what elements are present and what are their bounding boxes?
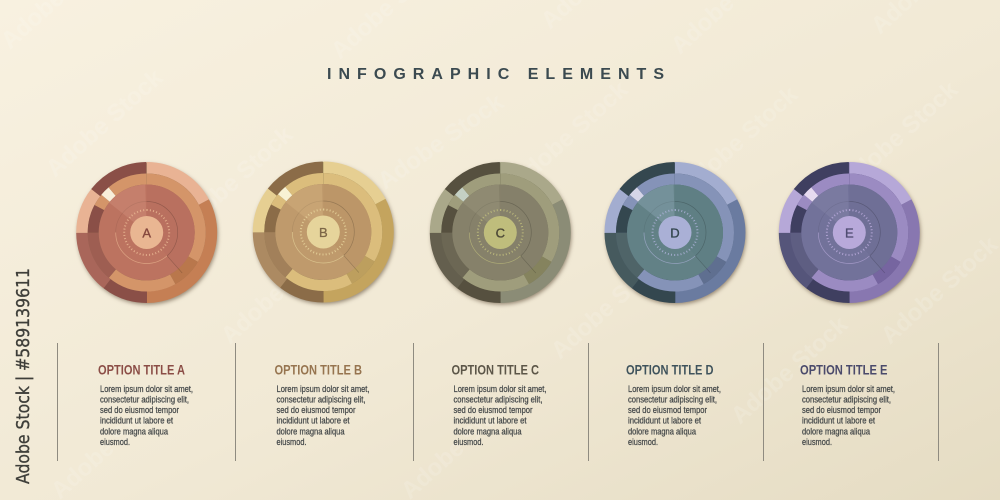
text block D — [626, 362, 721, 447]
stock watermark pattern: Adobe Stock — [726, 311, 854, 429]
text block E: OPTION TITLE E — [800, 362, 888, 378]
stock watermark pattern: Adobe Stock — [676, 81, 804, 199]
text block C: incididunt ut labore et — [454, 416, 527, 426]
text block B: eiusmod. — [276, 437, 306, 447]
text block B: Lorem ipsum dolor sit amet, — [276, 384, 370, 394]
text block E: Lorem ipsum dolor sit amet, — [802, 384, 895, 394]
text block C: dolore magna aliqua — [454, 426, 522, 436]
badge A: A — [142, 225, 151, 240]
title: INFOGRAPHIC ELEMENTS — [327, 66, 664, 83]
text block B — [274, 362, 370, 447]
text block A: sed do eiusmod tempor — [100, 405, 179, 415]
text block D: dolore magna aliqua — [628, 426, 697, 436]
text block C: Lorem ipsum dolor sit amet, — [454, 384, 546, 394]
wheel A — [77, 162, 217, 302]
text block B: OPTION TITLE B — [274, 362, 362, 378]
wheel E — [779, 162, 919, 302]
text block A: Lorem ipsum dolor sit amet, — [100, 384, 193, 394]
badge C: C — [496, 225, 505, 240]
stock watermark pattern: Adobe Stock — [41, 64, 169, 182]
text block C: OPTION TITLE C — [452, 362, 539, 378]
text block C: sed do eiusmod tempor — [454, 405, 532, 415]
text block D: consectetur adipiscing elit, — [628, 394, 717, 404]
stock watermark pattern: Adobe Stock — [546, 246, 674, 364]
text block E: dolore magna aliqua — [802, 426, 871, 436]
stock watermark pattern: Adobe Stock — [216, 231, 344, 349]
text block B: dolore magna aliqua — [276, 426, 345, 436]
stock watermark pattern: Adobe Stock — [506, 76, 634, 194]
text block B: sed do eiusmod tempor — [276, 405, 356, 415]
text block D: OPTION TITLE D — [626, 362, 714, 378]
text block C: eiusmod. — [454, 437, 484, 447]
wheel B — [253, 162, 393, 302]
text block A: incididunt ut labore et — [100, 416, 173, 426]
text block C — [452, 362, 546, 447]
badge B: B — [319, 225, 328, 240]
stock watermark pattern: Adobe Stock — [876, 231, 1000, 349]
wheel C — [430, 162, 570, 302]
stock id label: Adobe Stock | #589139611 — [13, 268, 34, 484]
text block C: consectetur adipiscing elit, — [454, 394, 542, 404]
text block A: OPTION TITLE A — [98, 362, 185, 378]
text block B: incididunt ut labore et — [276, 416, 350, 426]
text block A: consectetur adipiscing elit, — [100, 394, 189, 404]
text block D: incididunt ut labore et — [628, 416, 701, 426]
text block E — [800, 362, 895, 447]
text block E: eiusmod. — [802, 437, 832, 447]
text block D: sed do eiusmod tempor — [628, 405, 707, 415]
text block A: eiusmod. — [100, 437, 130, 447]
text block D: Lorem ipsum dolor sit amet, — [628, 384, 721, 394]
wheel D — [605, 162, 745, 302]
text block E: consectetur adipiscing elit, — [802, 394, 891, 404]
stock watermark pattern: Adobe Stock — [171, 121, 299, 239]
text block E: sed do eiusmod tempor — [802, 405, 881, 415]
text block B: consectetur adipiscing elit, — [276, 394, 366, 404]
stock watermark pattern: Adobe Stock — [373, 88, 509, 195]
text block A: dolore magna aliqua — [100, 426, 169, 436]
badge E: E — [845, 225, 854, 240]
text block A — [98, 362, 193, 447]
text block D: eiusmod. — [628, 437, 658, 447]
badge D: D — [670, 225, 680, 240]
text block E: incididunt ut labore et — [802, 416, 875, 426]
stock watermark pattern: Adobe Stock — [836, 76, 964, 194]
